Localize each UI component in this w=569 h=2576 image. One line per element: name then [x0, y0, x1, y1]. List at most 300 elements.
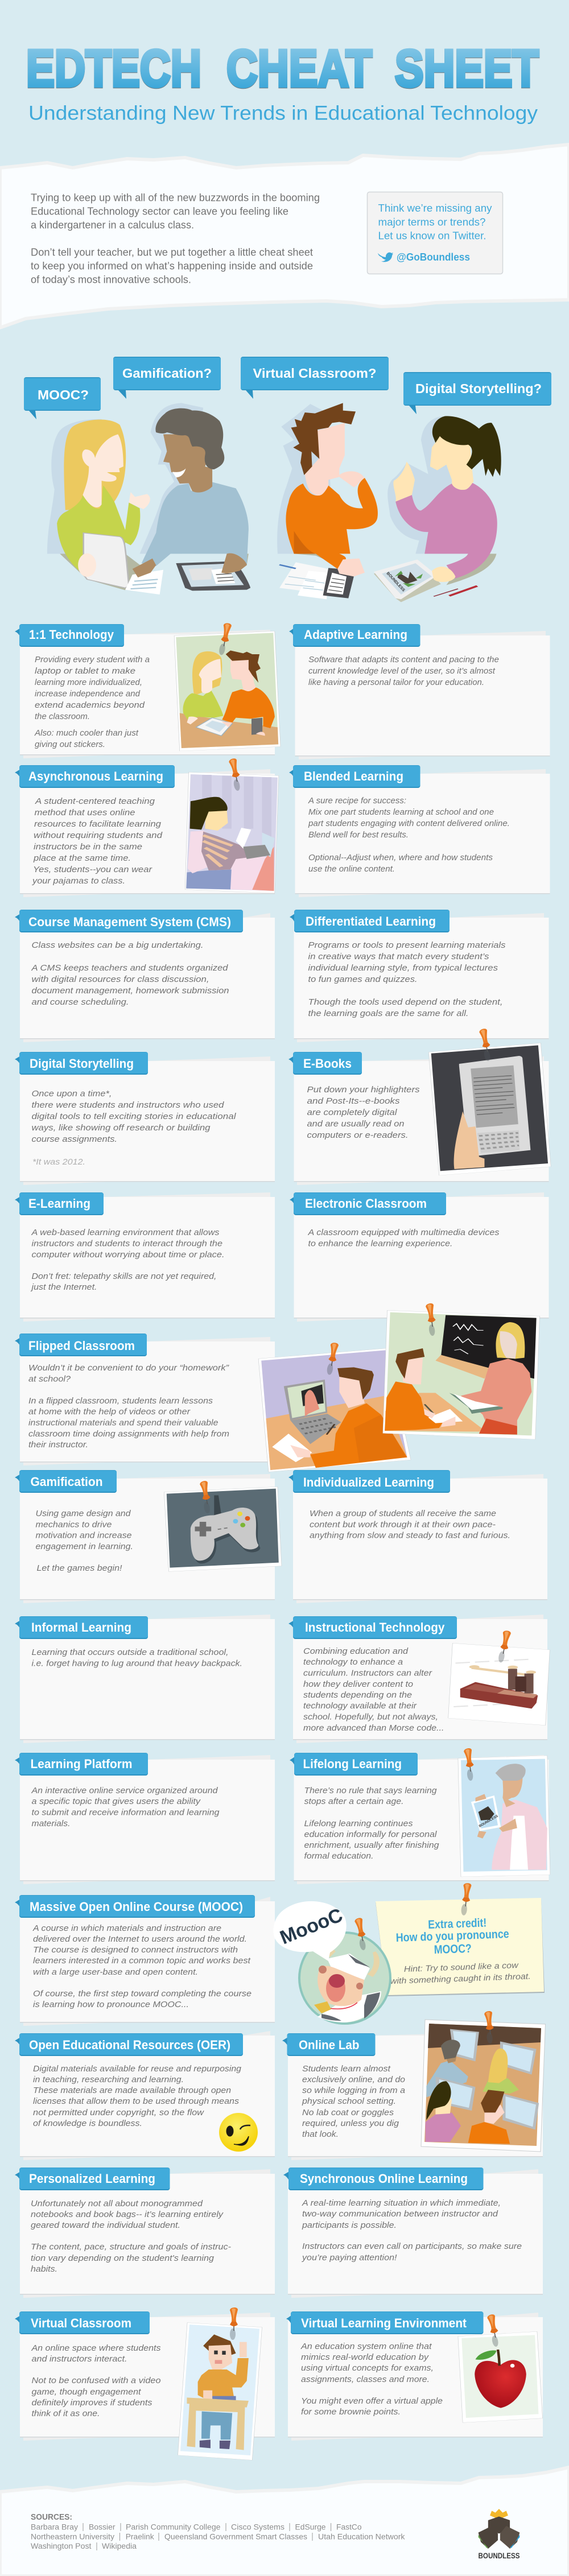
- heading: Instructional Technology: [305, 1620, 445, 1634]
- panel: Massive Open Online Course (MOOC): [15, 1895, 275, 2026]
- description: like having a personal tailor for your education.: [308, 678, 484, 687]
- intro text: to keep you informed on what’s happening inside and outside: [31, 259, 313, 272]
- sources: Northeastern University: [31, 2532, 114, 2541]
- intro text: [31, 191, 320, 286]
- white intro band with torn paper edges: [0, 145, 569, 328]
- speech bubble: Digital Storytelling: [403, 372, 551, 414]
- description: [308, 655, 499, 687]
- photo: red apple: [458, 2314, 543, 2422]
- heading: Asynchronous Learning: [28, 769, 163, 783]
- description: formal education.: [304, 1852, 373, 1861]
- description: delivered over the Internet to users around the world.: [33, 1935, 247, 1944]
- description: [35, 1509, 133, 1573]
- icon: winking smiley: [219, 2113, 258, 2152]
- panel: 1:1 Technology: [15, 622, 281, 758]
- description: [304, 1786, 439, 1861]
- panel: E-Learning: [15, 1192, 275, 1322]
- description: exclusively online, and do: [302, 2075, 405, 2084]
- description: An education system online that: [300, 2342, 432, 2351]
- sources: Washington Post: [31, 2541, 92, 2550]
- description: A sure recipe for success:: [308, 796, 406, 806]
- speech bubble: Virtual Classroom: [241, 357, 389, 399]
- extra credit note: Extra credit!: [428, 1916, 487, 1931]
- sources: Queensland Government Smart Classes: [164, 2532, 307, 2541]
- description: content but work through it at their own pace-: [310, 1520, 496, 1529]
- extra credit note: MOOC?: [434, 1942, 472, 1956]
- description: instructional materials and spend their valuable: [28, 1419, 218, 1428]
- description: technology available at their: [303, 1702, 417, 1711]
- description: education informally for personal: [304, 1830, 437, 1839]
- description: classroom time doing assignments with help from: [28, 1430, 229, 1439]
- description: [32, 1648, 242, 1668]
- description: Combining education and: [303, 1647, 409, 1656]
- description: A student-centered teaching: [35, 797, 155, 806]
- description: not permitted under copyright, so the flow: [33, 2108, 205, 2117]
- description: laptop or tablet to make: [35, 667, 135, 676]
- panel: Electronic Classroom: [290, 1192, 549, 1322]
- description: curriculum. Instructors can alter: [303, 1669, 432, 1678]
- heading: Open Educational Resources (OER): [29, 2038, 230, 2052]
- speech bubble: Virtual Classroom: Virtual Classroom?: [253, 366, 377, 381]
- logo: Boundless: [478, 2509, 520, 2560]
- description: A classroom equipped with multimedia devices: [307, 1228, 500, 1237]
- heading: [15, 2033, 243, 2056]
- description: [307, 1228, 500, 1248]
- description: The content, pace, structure and goals of instruc-: [31, 2243, 231, 2252]
- photo: telegraph key: [448, 1630, 550, 1725]
- heading: [283, 2168, 484, 2190]
- heading: [289, 624, 420, 647]
- heading: [15, 1192, 104, 1215]
- description: document management, homework submission: [32, 986, 229, 996]
- panel: Blended Learning: [289, 765, 550, 897]
- panel: Lifelong Learning: [290, 1748, 550, 1884]
- heading: [15, 910, 243, 932]
- description: increase independence and: [35, 690, 141, 699]
- panel: Course Management System (CMS): [15, 910, 275, 1042]
- description: [32, 797, 163, 886]
- description: mechanics to drive: [35, 1520, 112, 1529]
- description: computer without worrying about time or place.: [32, 1250, 224, 1260]
- panel: Gamification: [15, 1470, 282, 1603]
- description: at home with the help of videos or other: [28, 1407, 191, 1417]
- panel: Personalized Learning: [15, 2168, 275, 2298]
- heading: Personalized Learning: [29, 2172, 155, 2186]
- photo: game controller: [164, 1480, 282, 1571]
- description: is learning how to pronounce MOOC...: [33, 2000, 189, 2009]
- description: the classroom.: [35, 712, 90, 721]
- description: enrichment, usually after finishing: [304, 1841, 439, 1850]
- description: participants is possible.: [302, 2221, 397, 2230]
- description: No lab coat or goggles: [302, 2108, 394, 2117]
- description: [31, 941, 229, 1007]
- student: ponytail with tablet: [374, 416, 501, 602]
- description: a specific topic that gives users the ability: [32, 1797, 201, 1806]
- description: i.e. forget having to lug around that heavy backpack.: [32, 1659, 242, 1668]
- description: without requiring students and: [34, 831, 163, 840]
- heading: [290, 910, 450, 932]
- description: mimics real-world education by: [301, 2353, 429, 2362]
- panel: Virtual Learning Environment: [286, 2311, 543, 2441]
- speech bubble: MOOC: [24, 377, 101, 419]
- description: Put down your highlighters: [307, 1085, 420, 1095]
- sources: Cisco Systems: [231, 2523, 284, 2532]
- heading: E-Learning: [28, 1196, 90, 1211]
- title: [26, 40, 539, 98]
- description: you’re paying attention!: [302, 2253, 397, 2263]
- description: are completely digital: [307, 1108, 397, 1117]
- description: engagement in learning.: [35, 1542, 133, 1551]
- intro text: Educational Technology sector can leave you feeling like: [31, 205, 288, 217]
- description: [310, 1509, 510, 1541]
- photo: pixel-art student at desk: [178, 2307, 262, 2460]
- callout: Twitter: @GoBoundless: [397, 251, 470, 263]
- heading: [15, 765, 175, 788]
- heading: Informal Learning: [31, 1620, 131, 1634]
- heading: [15, 1334, 147, 1356]
- description: A web-based learning environment that allows: [31, 1228, 219, 1237]
- icon: pin: [426, 1303, 438, 1336]
- description: Programs or tools to present learning materials: [308, 941, 505, 950]
- description: Let the games begin!: [36, 1564, 122, 1573]
- heading: E-Books: [303, 1056, 352, 1071]
- heading: [288, 1616, 457, 1639]
- description: in creative ways that match every student’s: [308, 952, 489, 961]
- description: giving out stickers.: [35, 740, 105, 749]
- description: digital tools to tell exciting stories in educational: [32, 1112, 236, 1121]
- sources: Wikipedia: [102, 2541, 137, 2550]
- intro text: of today’s most innovative schools.: [31, 273, 191, 286]
- description: A course in which materials and instruction are: [32, 1924, 221, 1933]
- icon: pin: [486, 2314, 501, 2347]
- description: learning more individualized,: [35, 678, 142, 687]
- description: [302, 2065, 405, 2139]
- student: spiky hair with phone: [277, 403, 378, 599]
- description: Blend well for best results.: [308, 831, 409, 840]
- heading: [15, 2168, 170, 2190]
- student: curly hair with tablet: [133, 403, 250, 591]
- description: assignments, classes and more.: [301, 2375, 430, 2384]
- icon: pin: [498, 1630, 511, 1663]
- description: required, unless you dig: [302, 2119, 399, 2128]
- heading: Individualized Learning: [303, 1475, 434, 1489]
- sources: FastCo: [336, 2523, 362, 2532]
- description: anything from slow and steady to fast and furious.: [310, 1531, 510, 1541]
- description: notebooks and book bags-- it’s learning entirely: [31, 2210, 224, 2219]
- heading: [15, 1753, 148, 1776]
- heading: [15, 624, 124, 647]
- description: [34, 655, 150, 749]
- description: more advanced than Morse code...: [303, 1724, 444, 1733]
- intro text: Don’t tell your teacher, but we put together a little cheat sheet: [31, 246, 313, 258]
- description: your pajamas to class.: [32, 877, 125, 886]
- description: licenses that allow them to be used through means: [33, 2097, 239, 2106]
- sources: Bossier: [89, 2523, 116, 2532]
- intro text: Trying to keep up with all of the new buzzwords in the booming: [31, 191, 320, 204]
- speech bubble with sound: MoooC: [277, 1904, 346, 1948]
- heading: [289, 765, 420, 788]
- description: Optional--Adjust when, where and how students: [308, 853, 493, 862]
- heading: [15, 1616, 148, 1639]
- heading: Online Lab: [299, 2038, 360, 2052]
- description: Lifelong learning continues: [304, 1819, 413, 1828]
- description: at school?: [28, 1374, 71, 1384]
- description: Students learn almost: [302, 2065, 391, 2074]
- description: Not to be confused with a video: [32, 2376, 160, 2385]
- callout: Twitter: major terms or trends?: [378, 216, 486, 228]
- description: use the online content.: [308, 865, 395, 874]
- description: and instructors interact.: [32, 2355, 127, 2364]
- photo: student with laptop in pajamas: [185, 758, 279, 893]
- description: [32, 1089, 236, 1167]
- description: Providing every student with a: [35, 655, 150, 664]
- icon: pin: [327, 1342, 339, 1376]
- description: physical school setting.: [302, 2097, 396, 2106]
- extra credit note: How do you pronounce: [395, 1927, 509, 1945]
- heading: Massive Open Online Course (MOOC): [30, 1900, 243, 1914]
- speech bubble: Digital Storytelling: Digital Storytelling?: [415, 381, 542, 396]
- description: [308, 796, 510, 874]
- sources: SOURCES:: [31, 2513, 72, 2522]
- description: [302, 2199, 522, 2263]
- description: [31, 2199, 231, 2274]
- description: Wouldn’t it be convenient to do your “homework”: [28, 1364, 229, 1373]
- speech bubble: Gamification: [113, 357, 221, 399]
- description: to fun games and quizzes.: [308, 975, 418, 984]
- description: Class websites can be a big undertaking.: [32, 941, 204, 950]
- heading: [282, 2033, 376, 2056]
- heading: Learning Platform: [31, 1757, 132, 1771]
- title: EDTECH: [26, 40, 201, 98]
- description: technology to enhance a: [303, 1658, 403, 1667]
- heading: [288, 1470, 450, 1493]
- description: Mix one part students learning at school and one: [308, 808, 494, 817]
- illustration: four students talking: [47, 403, 501, 602]
- icon: pin: [479, 1028, 493, 1062]
- heading: Adaptive Learning: [304, 628, 407, 642]
- heading: Differentiated Learning: [306, 914, 436, 928]
- heading: [290, 1192, 446, 1215]
- description: [30, 1228, 225, 1292]
- description: so while logging in from a: [302, 2086, 405, 2095]
- icon: pin: [200, 1480, 213, 1514]
- description: [300, 2342, 443, 2417]
- heading: [288, 1052, 362, 1075]
- heading: [15, 2311, 150, 2334]
- description: [303, 1647, 444, 1733]
- description: there were students and instructors who used: [32, 1101, 225, 1110]
- extra credit note: [376, 1883, 545, 1996]
- photo: two students with tablet: [174, 622, 281, 751]
- icon: pin: [228, 758, 243, 791]
- student: blonde with tablet: [47, 419, 163, 595]
- description: with a large user-base and open content.: [33, 1968, 198, 1977]
- heading: 1:1 Technology: [29, 628, 114, 642]
- icon: pin: [354, 1917, 369, 1951]
- sources: Barbara Bray: [31, 2523, 78, 2532]
- heading: [290, 1753, 418, 1776]
- callout: Twitter: Let us know on Twitter.: [378, 230, 486, 241]
- description: *It was 2012.: [32, 1158, 85, 1167]
- description: Of course, the first step toward completing the course: [33, 1989, 251, 1999]
- photo: older woman with tablet: [458, 1748, 550, 1877]
- panel: Asynchronous Learning: [15, 758, 279, 897]
- heading: Gamification: [31, 1475, 102, 1489]
- description: Also: much cooler than just: [34, 729, 139, 738]
- icon: twitter bird: [378, 253, 393, 262]
- speech bubble: Gamification: Gamification?: [122, 366, 212, 381]
- description: instructors be in the same: [34, 843, 142, 852]
- heading: [15, 1052, 148, 1075]
- panel: Individualized Learning: [288, 1470, 547, 1603]
- description: habits.: [31, 2265, 57, 2274]
- photo: students in computer lab: [421, 2011, 545, 2152]
- description: computers or e-readers.: [307, 1131, 409, 1140]
- heading: Virtual Learning Environment: [301, 2316, 467, 2330]
- description: [32, 1924, 251, 2009]
- sources: Utah Education Network: [318, 2532, 406, 2541]
- heading: Virtual Classroom: [31, 2316, 131, 2330]
- icon: pin: [218, 622, 232, 656]
- description: tion vary depending on the student's learning: [31, 2254, 214, 2263]
- description: and course scheduling.: [32, 998, 129, 1007]
- description: of knowledge is boundless.: [33, 2119, 142, 2128]
- subtitle: Understanding New Trends in Educational Technology: [28, 102, 538, 124]
- panel: Digital Storytelling: [15, 1052, 275, 1185]
- callout: Twitter: [368, 192, 503, 274]
- photo: e-reader in hand: [428, 1028, 551, 1175]
- panel: Adaptive Learning: [289, 624, 550, 759]
- description: with digital resources for class discussion,: [32, 975, 209, 984]
- heading: Synchronous Online Learning: [300, 2172, 468, 2186]
- panel: E-Books: [288, 1028, 551, 1185]
- description: materials.: [32, 1819, 71, 1828]
- extra credit note: with something caught in its throat.: [390, 1972, 531, 1986]
- intro text: a kindergartener in a calculus class.: [31, 218, 194, 231]
- description: geared toward the individual student.: [31, 2221, 180, 2230]
- description: definitely improves if students: [32, 2399, 152, 2408]
- description: Digital materials available for reuse and repurposing: [33, 2065, 241, 2074]
- description: just the Internet.: [30, 1283, 97, 1292]
- speech bubble: MOOC: MOOC?: [38, 387, 89, 402]
- description: Learning that occurs outside a traditional school,: [32, 1648, 229, 1657]
- icon: pin: [461, 1883, 472, 1916]
- sources: Praelink: [126, 2532, 155, 2541]
- panel: Synchronous Online Learning: [283, 2168, 543, 2298]
- title: SHEET: [395, 40, 539, 98]
- description: in teaching, researching and learning.: [33, 2075, 184, 2084]
- description: A real-time learning situation in which immediate,: [302, 2199, 501, 2208]
- description: and Post-Its--e-books: [307, 1097, 399, 1106]
- heading: Lifelong Learning: [303, 1757, 402, 1771]
- icon: pin: [230, 2307, 238, 2340]
- description: resources to facilitate learning: [34, 820, 161, 829]
- description: two-way communication between instructor and: [302, 2210, 498, 2219]
- heading: Flipped Classroom: [28, 1339, 135, 1353]
- description: When a group of students all receive the same: [310, 1509, 496, 1518]
- description: Using game design and: [35, 1509, 131, 1518]
- description: [308, 941, 505, 1018]
- tablet brand text: BOUNDLESS: [479, 1815, 499, 1828]
- description: part students engaging with content delivered online.: [308, 819, 510, 828]
- icon: pin: [464, 1748, 476, 1781]
- white footer band with torn edge: [0, 2467, 569, 2576]
- description: These materials are made available through open: [33, 2086, 231, 2095]
- description: current knowledge level of the user, so it’s almost: [308, 667, 496, 676]
- description: An online space where students: [31, 2344, 160, 2353]
- description: using virtual concepts for exams,: [301, 2364, 434, 2373]
- sources: EdSurge: [295, 2523, 326, 2532]
- description: Unfortunately not all about monogrammed: [31, 2199, 203, 2208]
- description: [28, 1364, 229, 1450]
- description: the learning goals are the same for all.: [308, 1009, 469, 1018]
- title: CHEAT: [226, 40, 372, 98]
- description: There’s no rule that says learning: [304, 1786, 437, 1795]
- photo: student watching lecture on laptop: [258, 1342, 411, 1472]
- heading: Course Management System (CMS): [28, 915, 231, 929]
- panel: Flipped Classroom: [15, 1303, 539, 1472]
- description: instructors and students to interact through the: [32, 1239, 222, 1248]
- icon: pin: [484, 2011, 496, 2044]
- description: You might even offer a virtual apple: [301, 2397, 443, 2406]
- description: for some brownie points.: [301, 2408, 401, 2417]
- description: and are usually read on: [307, 1120, 404, 1129]
- heading: [15, 1895, 255, 1918]
- panel: Open Educational Resources (OER): [15, 2031, 275, 2160]
- description: Don’t fret: telepathy skills are not yet required,: [32, 1272, 216, 1281]
- description: A CMS keeps teachers and students organized: [31, 964, 229, 973]
- description: [307, 1085, 420, 1140]
- description: [31, 2344, 160, 2418]
- description: Once upon a time*,: [32, 1089, 112, 1099]
- description: [31, 1786, 220, 1828]
- panel: Instructional Technology: [288, 1615, 550, 1743]
- callout: Twitter: Think we’re missing any: [378, 203, 492, 214]
- description: extend academics beyond: [35, 701, 145, 710]
- description: to enhance the learning experience.: [308, 1239, 453, 1248]
- panel: Virtual Classroom: [15, 2307, 275, 2460]
- heading: [15, 1470, 117, 1493]
- sources: [31, 2513, 406, 2550]
- description: school. Hopefully, but not always,: [303, 1712, 438, 1722]
- heading: Blended Learning: [304, 769, 403, 783]
- cow badge: [299, 1933, 390, 2024]
- panel: Online Lab: [282, 2011, 545, 2160]
- description: The course is designed to connect instructors with: [33, 1946, 238, 1955]
- description: motivation and increase: [35, 1531, 132, 1541]
- description: Instructors can even call on participants, so make sure: [302, 2242, 522, 2251]
- description: place at the same time.: [33, 854, 131, 863]
- description: In a flipped classroom, students learn lessons: [28, 1397, 213, 1406]
- sources: Parish Community College: [126, 2523, 221, 2532]
- heading: Digital Storytelling: [30, 1056, 134, 1071]
- panel: Informal Learning: [15, 1615, 275, 1743]
- heading: [286, 2311, 484, 2334]
- panel: Learning Platform: [15, 1753, 275, 1884]
- description: stops after a certain age.: [304, 1797, 404, 1806]
- description: [33, 2065, 241, 2128]
- extra credit note: Hint: Try to sound like a cow: [404, 1961, 519, 1974]
- description: method that uses online: [34, 808, 135, 818]
- description: their instructor.: [28, 1440, 88, 1450]
- illustration: cow saying Moooc: [274, 1901, 390, 2024]
- description: Software that adapts its content and pacing to the: [308, 655, 499, 664]
- description: course assignments.: [32, 1135, 117, 1144]
- heading: Electronic Classroom: [305, 1196, 427, 1211]
- description: ways, like showing off research or building: [32, 1124, 211, 1133]
- description: An interactive online service organized around: [31, 1786, 218, 1795]
- description: think of it as one.: [32, 2409, 100, 2418]
